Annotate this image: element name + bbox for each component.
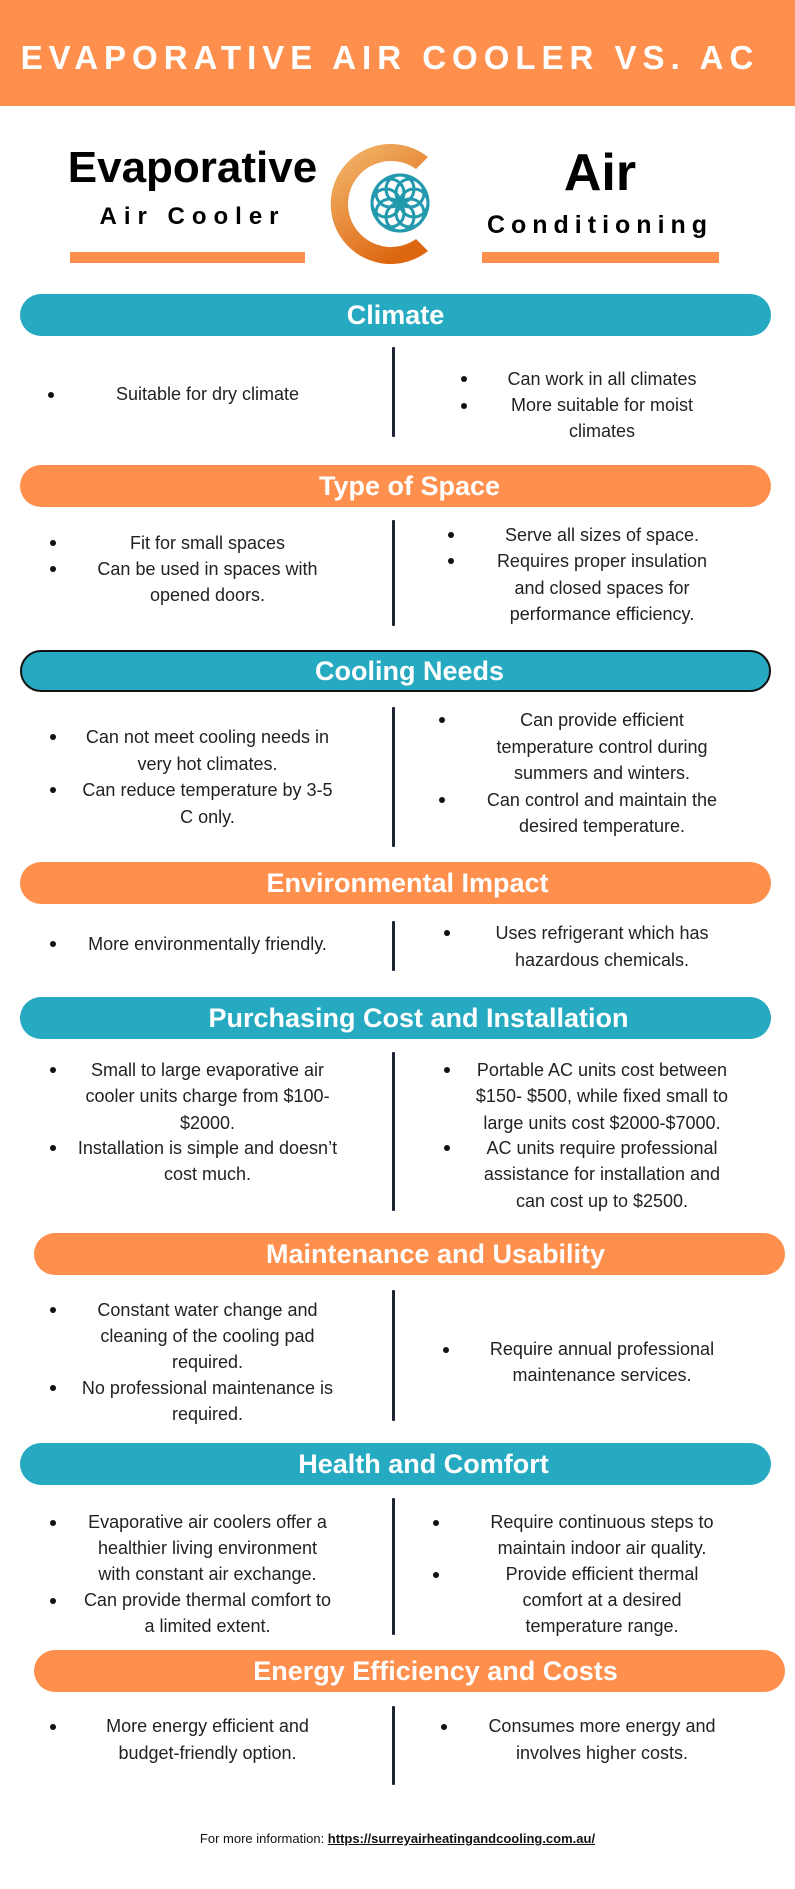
health content: with constant air exchange. bbox=[98, 1564, 317, 1584]
cooling needs content: Can provide efficient bbox=[520, 710, 684, 730]
maintenance content: No professional maintenance is bbox=[82, 1378, 333, 1398]
section bar: Climate: Climate bbox=[347, 300, 444, 330]
cooling needs content: C only. bbox=[180, 807, 235, 827]
energy content: Consumes more energy and bbox=[488, 1716, 716, 1736]
section bar: Cooling Needs: Cooling Needs bbox=[315, 656, 504, 686]
section bar: Health and Comfort bbox=[20, 1443, 771, 1485]
climate content: Suitable for dry climate bbox=[116, 384, 299, 404]
climate content bbox=[48, 347, 697, 441]
type of space content: Serve all sizes of space. bbox=[505, 525, 699, 545]
purchasing content: AC units require professional bbox=[486, 1138, 718, 1158]
health content: maintain indoor air quality. bbox=[498, 1538, 706, 1558]
purchasing content: Small to large evaporative air bbox=[91, 1060, 324, 1080]
footer: For more information: https://surreyairheatingandcooling.com.au/ bbox=[200, 1831, 595, 1846]
maintenance content: cleaning of the cooling pad bbox=[100, 1326, 315, 1346]
type of space content: and closed spaces for bbox=[514, 578, 690, 598]
type of space content: Requires proper insulation bbox=[497, 551, 707, 571]
cooling needs content: Can reduce temperature by 3-5 bbox=[82, 780, 333, 800]
section bar: Type of Space: Type of Space bbox=[319, 471, 500, 501]
cooling needs content: desired temperature. bbox=[519, 816, 685, 836]
health content: temperature range. bbox=[525, 1616, 679, 1636]
maintenance content: required. bbox=[172, 1352, 243, 1372]
type of space content: opened doors. bbox=[150, 585, 265, 605]
logo bbox=[330, 144, 430, 264]
health content: Evaporative air coolers offer a bbox=[88, 1512, 327, 1532]
maintenance content: maintenance services. bbox=[512, 1365, 692, 1385]
environmental content: hazardous chemicals. bbox=[515, 950, 689, 970]
purchasing content: Installation is simple and doesn’t bbox=[78, 1138, 337, 1158]
purchasing content: large units cost $2000-$7000. bbox=[483, 1113, 721, 1133]
purchasing content: cooler units charge from $100- bbox=[85, 1086, 330, 1106]
purchasing content: assistance for installation and bbox=[484, 1164, 720, 1184]
health content: Can provide thermal comfort to bbox=[84, 1590, 331, 1610]
section bar: Environmental Impact: Environmental Impact bbox=[266, 868, 549, 898]
health content: Require continuous steps to bbox=[490, 1512, 714, 1532]
left heading: Air Cooler bbox=[99, 203, 286, 230]
energy content: involves higher costs. bbox=[516, 1743, 688, 1763]
cooling needs content: Can control and maintain the bbox=[487, 790, 717, 810]
purchasing content: Portable AC units cost between bbox=[477, 1060, 727, 1080]
maintenance content: Require annual professional bbox=[490, 1339, 714, 1359]
health content bbox=[50, 1498, 714, 1636]
health content: healthier living environment bbox=[98, 1538, 317, 1558]
purchasing content: cost much. bbox=[164, 1164, 251, 1184]
health content: Provide efficient thermal bbox=[506, 1564, 698, 1584]
purchasing content: can cost up to $2500. bbox=[516, 1191, 688, 1211]
cooling needs content: Can not meet cooling needs in bbox=[86, 727, 329, 747]
maintenance content: Constant water change and bbox=[97, 1300, 318, 1320]
purchasing content: $150- $500, while fixed small to bbox=[476, 1086, 728, 1106]
right heading: Conditioning bbox=[487, 211, 713, 239]
environmental content bbox=[50, 921, 709, 971]
energy content bbox=[50, 1706, 716, 1785]
section bar: Energy Efficiency and Costs: Energy Efficiency and Costs bbox=[253, 1656, 618, 1686]
maintenance content: required. bbox=[172, 1404, 243, 1424]
purchasing content bbox=[50, 1052, 728, 1211]
type of space content: Fit for small spaces bbox=[130, 533, 285, 553]
environmental content: More environmentally friendly. bbox=[88, 934, 327, 954]
section bar: Purchasing Cost and Installation: Purchasing Cost and Installation bbox=[208, 1003, 629, 1033]
right heading bbox=[482, 144, 719, 263]
cooling needs content: very hot climates. bbox=[137, 754, 278, 774]
title: EVAPORATIVE AIR COOLER VS. AC bbox=[21, 39, 759, 76]
section bar: Maintenance and Usability: Maintenance and Usability bbox=[266, 1239, 605, 1269]
type of space content bbox=[50, 520, 707, 626]
climate content: Can work in all climates bbox=[507, 369, 697, 389]
purchasing content: $2000. bbox=[180, 1113, 235, 1133]
left heading: Evaporative bbox=[68, 143, 317, 192]
section bar: Environmental Impact bbox=[20, 862, 771, 904]
section bar: Purchasing Cost and Installation bbox=[20, 997, 771, 1039]
section bar: Maintenance and Usability bbox=[34, 1233, 785, 1275]
section bar: Cooling Needs bbox=[20, 650, 771, 692]
energy content: More energy efficient and bbox=[106, 1716, 309, 1736]
energy content: budget-friendly option. bbox=[118, 1743, 297, 1763]
cooling needs content bbox=[50, 707, 717, 847]
maintenance content bbox=[50, 1290, 714, 1424]
cooling needs content: summers and winters. bbox=[514, 763, 690, 783]
header banner bbox=[0, 0, 795, 106]
section bar: Energy Efficiency and Costs bbox=[34, 1650, 785, 1692]
section bar: Type of Space bbox=[20, 465, 771, 507]
type of space content: Can be used in spaces with bbox=[97, 559, 318, 579]
climate content: climates bbox=[569, 421, 635, 441]
climate content: More suitable for moist bbox=[511, 395, 693, 415]
environmental content: Uses refrigerant which has bbox=[495, 923, 709, 943]
health content: a limited extent. bbox=[144, 1616, 271, 1636]
section bar: Health and Comfort: Health and Comfort bbox=[298, 1449, 549, 1479]
type of space content: performance efficiency. bbox=[510, 604, 694, 624]
section bar: Climate bbox=[20, 294, 771, 336]
right heading: Air bbox=[564, 144, 636, 202]
left heading bbox=[68, 143, 317, 263]
cooling needs content: temperature control during bbox=[496, 737, 708, 757]
health content: comfort at a desired bbox=[522, 1590, 682, 1610]
